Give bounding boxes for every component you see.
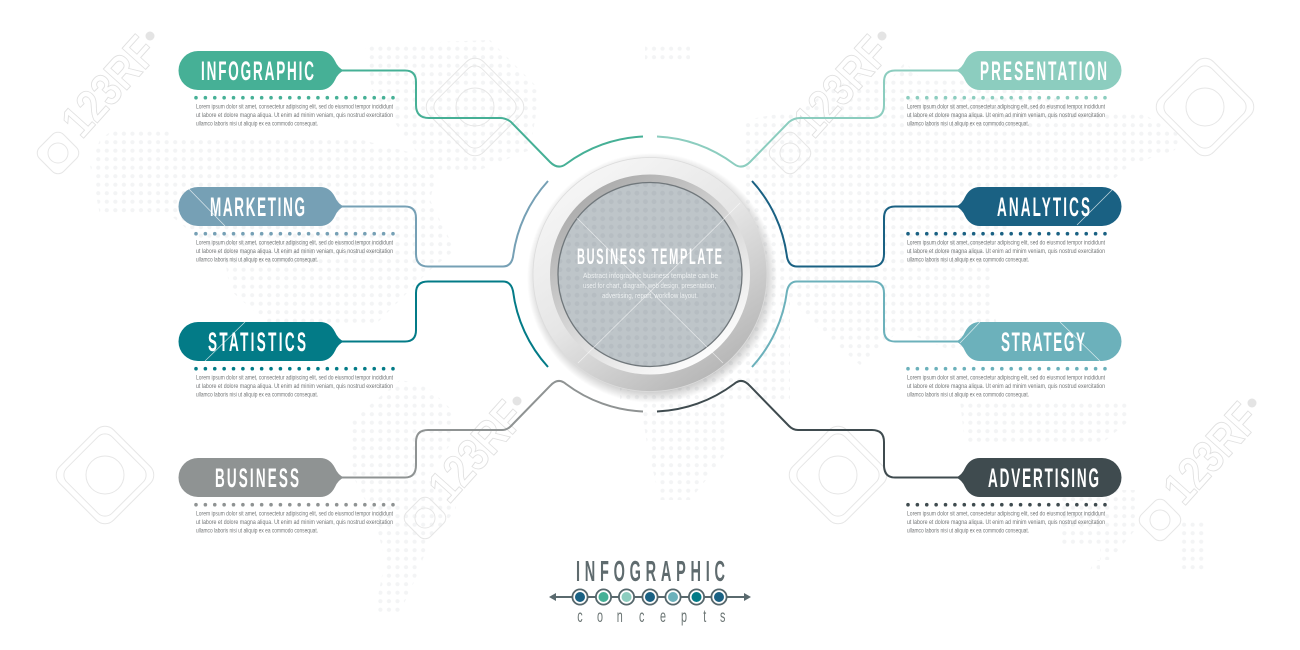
pill: marketing: MARKETING bbox=[210, 192, 305, 222]
pill: analytics: ANALYTICS bbox=[997, 192, 1090, 222]
body text: ut labore et dolore magna aliqua. Ut enim ad minim veniam, quis nostrud exercitation bbox=[196, 519, 393, 526]
dotted rule bbox=[908, 96, 1105, 99]
pill: infographic: INFOGRAPHIC bbox=[201, 56, 314, 86]
pill: presentation bbox=[956, 51, 1122, 90]
watermark stamps: 123RF bbox=[418, 391, 534, 512]
center heading: BUSINESS TEMPLATE bbox=[577, 244, 722, 269]
panel: marketing bbox=[179, 187, 393, 263]
pill: infographic bbox=[179, 51, 344, 90]
body text: ullamco laboris nisi ut aliquip ex ea commodo consequat. bbox=[907, 527, 1029, 534]
body text bbox=[196, 104, 393, 127]
body text: ullamco laboris nisi ut aliquip ex ea commodo consequat. bbox=[196, 120, 318, 127]
connector: business bbox=[342, 381, 643, 478]
pill: strategy: STRATEGY bbox=[1001, 327, 1085, 357]
body text: ullamco laboris nisi ut aliquip ex ea commodo consequat. bbox=[907, 120, 1029, 127]
body text: ullamco laboris nisi ut aliquip ex ea commodo consequat. bbox=[196, 527, 318, 534]
body text: ut labore et dolore magna aliqua. Ut enim ad minim veniam, quis nostrud exercitation bbox=[907, 248, 1105, 255]
body text: ut labore et dolore magna aliqua. Ut enim ad minim veniam, quis nostrud exercitation bbox=[907, 519, 1105, 526]
connector: strategy bbox=[752, 282, 958, 367]
watermark stamps: 123RF bbox=[51, 26, 167, 147]
panel: statistics bbox=[179, 322, 393, 398]
body text bbox=[907, 375, 1105, 398]
body text: Lorem ipsum dolor sit amet, consectetur adipiscing elit, sed do eiusmod tempor incididunt bbox=[907, 511, 1105, 518]
dotted rule bbox=[196, 96, 393, 99]
body text: ut labore et dolore magna aliqua. Ut enim ad minim veniam, quis nostrud exercitation bbox=[196, 248, 393, 255]
pill: marketing bbox=[179, 187, 344, 226]
body text: ut labore et dolore magna aliqua. Ut enim ad minim veniam, quis nostrud exercitation bbox=[907, 112, 1105, 119]
logo title: INFOGRAPHIC bbox=[576, 554, 725, 587]
pill: advertising: ADVERTISING bbox=[988, 463, 1099, 493]
body text bbox=[907, 240, 1105, 263]
body text: ut labore et dolore magna aliqua. Ut enim ad minim veniam, quis nostrud exercitation bbox=[196, 112, 393, 119]
body text: Lorem ipsum dolor sit amet, consectetur adipiscing elit, sed do eiusmod tempor incididunt bbox=[196, 511, 393, 518]
center text: advertising, report, workflow layout. bbox=[602, 291, 698, 300]
connector: marketing bbox=[342, 181, 548, 266]
body text: Lorem ipsum dolor sit amet, consectetur adipiscing elit, sed do eiusmod tempor incididunt bbox=[907, 375, 1105, 382]
body text: ut labore et dolore magna aliqua. Ut enim ad minim veniam, quis nostrud exercitation bbox=[907, 383, 1105, 390]
body text: Lorem ipsum dolor sit amet, consectetur adipiscing elit, sed do eiusmod tempor incididunt bbox=[196, 104, 393, 111]
dotted world map background bbox=[80, 30, 1220, 620]
watermark stamps: 123RF bbox=[1153, 393, 1269, 514]
panel: presentation bbox=[907, 51, 1122, 127]
central circle bbox=[527, 153, 777, 403]
dotted rule bbox=[196, 503, 393, 507]
connector: infographic bbox=[342, 70, 643, 167]
connector: analytics bbox=[752, 181, 958, 266]
panel: strategy bbox=[907, 322, 1122, 398]
panel: business bbox=[179, 458, 393, 534]
connector: advertising bbox=[657, 381, 958, 478]
watermark stamps bbox=[34, 26, 1269, 544]
panel: infographic bbox=[179, 51, 393, 127]
body text: ullamco laboris nisi ut aliquip ex ea commodo consequat. bbox=[196, 256, 318, 263]
body text: Lorem ipsum dolor sit amet, consectetur adipiscing elit, sed do eiusmod tempor incididunt bbox=[907, 240, 1105, 247]
pill: presentation: PRESENTATION bbox=[980, 56, 1107, 86]
dotted rule bbox=[908, 232, 1105, 235]
pill: statistics bbox=[179, 322, 344, 361]
body text: ullamco laboris nisi ut aliquip ex ea commodo consequat. bbox=[196, 391, 318, 398]
bottom logo bbox=[549, 554, 751, 627]
watermark stamps: 123RF bbox=[783, 26, 899, 147]
dotted rule bbox=[908, 503, 1105, 507]
connector: statistics bbox=[342, 282, 548, 367]
body text bbox=[907, 104, 1105, 127]
center text: Abstract infographic business template can be bbox=[583, 271, 718, 280]
body text bbox=[196, 511, 393, 534]
body text: ullamco laboris nisi ut aliquip ex ea commodo consequat. bbox=[907, 256, 1029, 263]
dotted rule bbox=[908, 367, 1105, 371]
center text: used for chart, diagram, web design, presentation, bbox=[583, 281, 716, 290]
body text bbox=[907, 511, 1105, 534]
body text bbox=[196, 240, 393, 263]
body text: Lorem ipsum dolor sit amet, consectetur adipiscing elit, sed do eiusmod tempor incididunt bbox=[196, 240, 393, 247]
body text: Lorem ipsum dolor sit amet, consectetur adipiscing elit, sed do eiusmod tempor incididunt bbox=[196, 375, 393, 382]
body text: ut labore et dolore magna aliqua. Ut enim ad minim veniam, quis nostrud exercitation bbox=[196, 383, 393, 390]
logo subtitle: concepts bbox=[577, 607, 725, 627]
body text bbox=[196, 375, 393, 398]
pill: advertising bbox=[956, 458, 1122, 497]
panel: analytics bbox=[907, 187, 1122, 263]
dotted rule bbox=[196, 367, 393, 371]
dotted rule bbox=[196, 232, 393, 235]
pill: analytics bbox=[956, 187, 1122, 226]
center text bbox=[583, 271, 718, 300]
pill: business bbox=[179, 458, 344, 497]
pill: strategy bbox=[956, 322, 1122, 361]
connector: presentation bbox=[657, 70, 958, 167]
body text: Lorem ipsum dolor sit amet, consectetur adipiscing elit, sed do eiusmod tempor incididunt bbox=[907, 104, 1105, 111]
pill: statistics: STATISTICS bbox=[208, 327, 306, 357]
pill: business: BUSINESS bbox=[215, 463, 299, 493]
panel: advertising bbox=[907, 458, 1122, 534]
body text: ullamco laboris nisi ut aliquip ex ea commodo consequat. bbox=[907, 391, 1029, 398]
icon: timeline with arrows bbox=[549, 589, 751, 605]
